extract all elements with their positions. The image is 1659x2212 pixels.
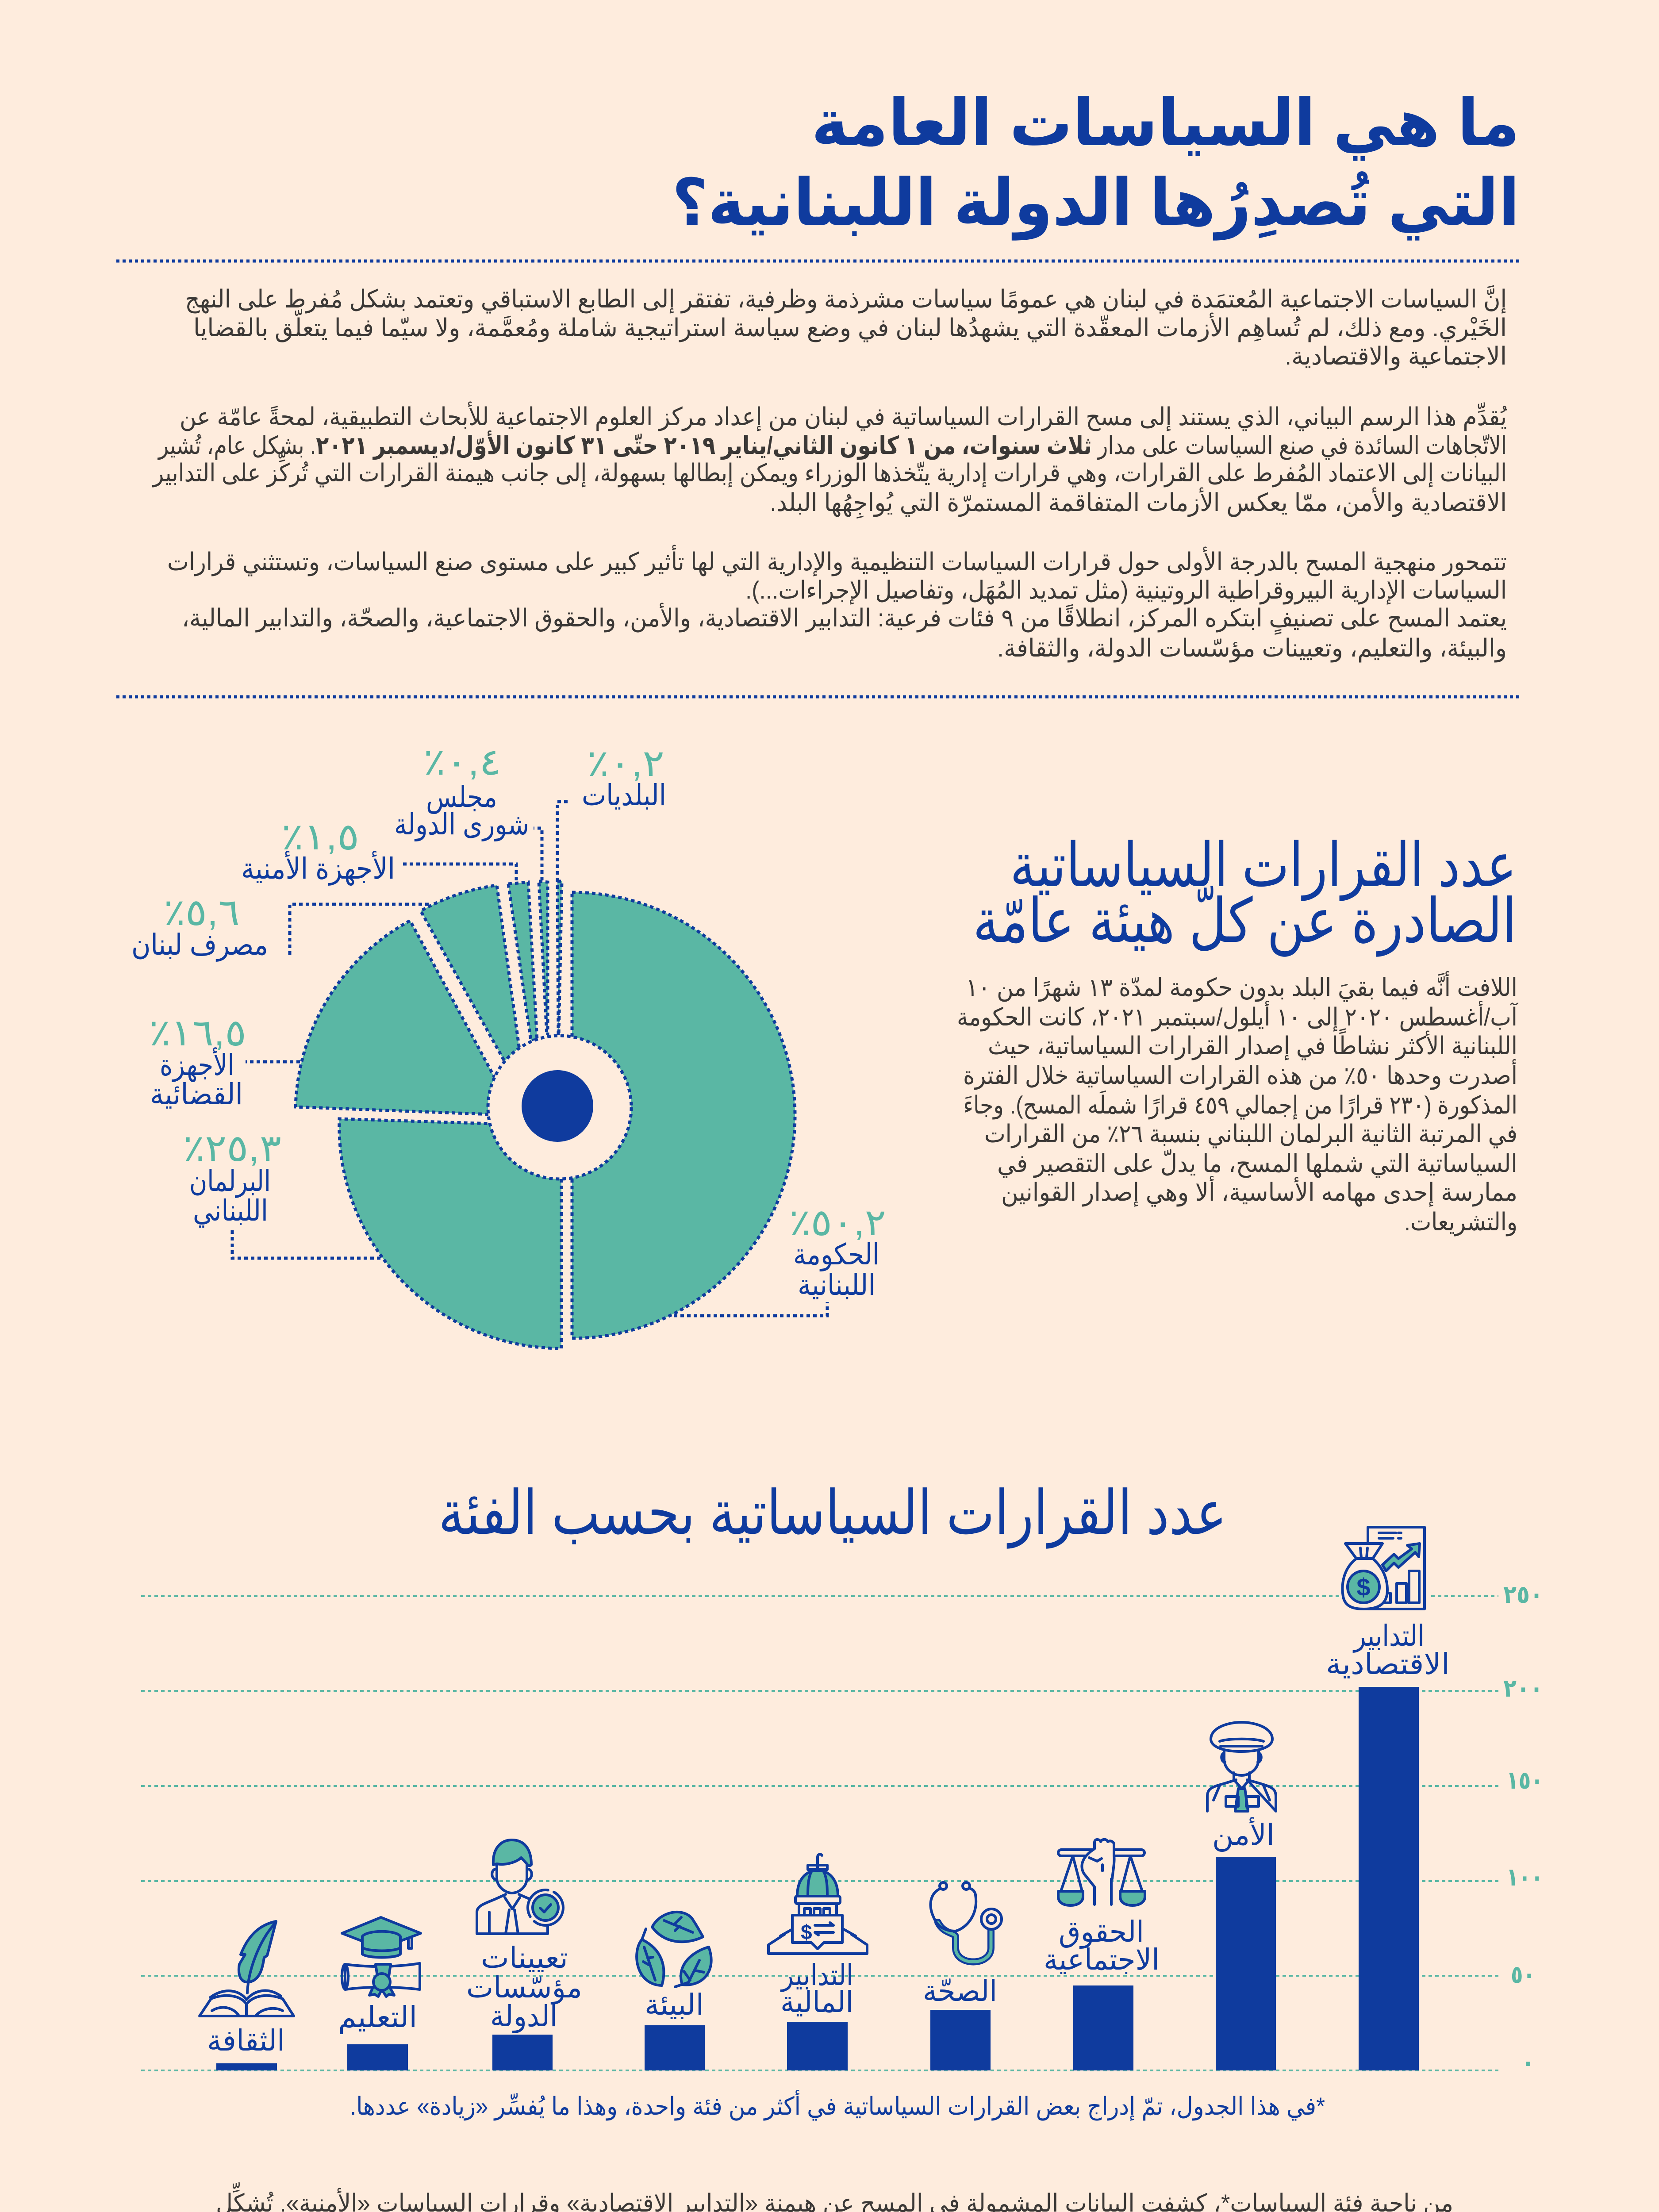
icon: money bag and chart <box>1343 1527 1425 1609</box>
bars <box>216 1687 1419 2070</box>
axis labels: ٥٠ <box>1511 1960 1535 1988</box>
icon: money bag and chart: $ <box>1356 1573 1371 1601</box>
icon: fist holding scales <box>1058 1839 1145 1905</box>
text block: public bodies commentary: اللافت أنَّه فيما بقيَ البلد بدون حكومة لمدّة ١٣ شهرًا من ١٠ <box>966 971 1517 1002</box>
label: parliament: البرلمان <box>189 1164 271 1198</box>
axis labels <box>1503 1580 1543 2076</box>
axis labels: ٠ <box>1521 2048 1536 2076</box>
bar labels: التدابير <box>780 1959 853 1992</box>
pie slice: judiciary 16.5% <box>296 921 515 1115</box>
label: municipalities <box>582 742 666 811</box>
text block: introduction: والبيئة، والتعليم، وتعيينات مؤسّسات الدولة، والثقافة. <box>997 634 1507 663</box>
pie slice: security agencies 1.5% <box>508 882 537 1041</box>
bar labels: الدولة <box>490 2000 557 2033</box>
text block: introduction: تتمحور منهجية المسح بالدرجة الأولى حول قرارات السياسات التنظيمية والإدارية التي لها تأثير كبير على مستوى صنع السياسات، وتستثني قرارات <box>167 545 1507 576</box>
label: state council: مجلس <box>426 780 497 814</box>
bar labels: الاقتصادية <box>1326 1647 1450 1680</box>
bar labels: المالية <box>780 1985 853 2018</box>
label: government: الحكومة <box>793 1238 879 1271</box>
panel: bar chart by category <box>141 1527 1543 2076</box>
pie slice: state council 0.4% <box>539 881 548 1035</box>
text block: introduction: يعتمد المسح على تصنيفٍ ابتكره المركز، انطلاقًا من ٩ فئات فرعية: التدابير الاقتصادية، والأمن، والحقوق الاجتماعية، والصحّة، والتدابير المالية، <box>182 603 1507 635</box>
text block: public bodies commentary: المذكورة (٢٣٠ قرارًا من إجمالي ٤٥٩ قرارًا شملَه المسح). وجاءَ <box>963 1091 1517 1120</box>
title: ما هي السياسات العامة <box>811 87 1520 161</box>
label: government: اللبنانية <box>798 1268 876 1301</box>
footnote: *في هذا الجدول، تمّ إدراج بعض القرارات السياساتية في أكثر من فئة واحدة، وهذا ما يُفسِّر «زيادة» عددها. <box>350 2090 1325 2121</box>
pie slice: central bank 5.6% <box>421 885 526 1101</box>
label: central bank: مصرف لبنان <box>131 928 268 962</box>
text block: introduction: الاقتصادية والأمن، ممّا يعكس الأزمات المتفاقمة المستمرّة التي يُواجِهُها البلد. <box>770 487 1507 519</box>
bar labels: مؤسّسات <box>466 1971 582 2005</box>
label: municipalities: البلديات <box>582 779 666 811</box>
label: parliament: ٢٥,٣٪ <box>183 1127 281 1169</box>
heading: decisions per public body: عدد القرارات السياساتية <box>1010 831 1517 901</box>
label: central bank: ٥,٦٪ <box>164 891 240 933</box>
bar labels: الاجتماعية <box>1044 1943 1160 1976</box>
label: central bank <box>131 891 268 962</box>
label: parliament <box>183 1127 281 1228</box>
icon: finance building <box>768 1854 867 1954</box>
text block: introduction: يُقدِّم هذا الرسم البياني، الذي يستند إلى مسح القرارات السياساتية في لبنان من إعداد مركز العلوم الاجتماعية للأبحاث التطبيقية، لمحةً عامّة عن <box>180 401 1507 432</box>
icon: appointed official <box>477 1840 563 1934</box>
bar labels <box>207 1619 1450 2057</box>
bar labels: الأمن <box>1212 1816 1275 1852</box>
label: state council <box>394 741 529 841</box>
label: parliament: اللبناني <box>193 1194 268 1228</box>
text block: introduction: السياسات الإدارية البيروقراطية الروتينية (مثل تمديد المُهَل، وتفاصيل الإجراءات...). <box>745 576 1507 605</box>
label: government: ٥٠,٢٪ <box>789 1202 886 1243</box>
icon: stethoscope <box>930 1882 1002 1962</box>
icon: finance building: $ <box>801 1920 812 1943</box>
label: security agencies <box>241 816 395 886</box>
label: government <box>789 1202 886 1301</box>
label: municipalities: ٠,٢٪ <box>587 742 664 784</box>
text block: public bodies commentary <box>957 971 1518 1237</box>
label: security agencies: ١,٥٪ <box>281 816 359 857</box>
label: state council: ٠,٤٪ <box>423 741 501 783</box>
label: state council: شورى الدولة <box>394 808 529 841</box>
bar labels: الصحّة <box>923 1974 997 2007</box>
text block: public bodies commentary: ممارسة إحدى مهامه الأساسية، ألا وهي إصدار القوانين <box>1001 1176 1517 1207</box>
bar labels: التعليم <box>338 2001 417 2034</box>
heading: decisions per public body <box>973 831 1517 957</box>
axis labels: ١٥٠ <box>1506 1766 1543 1794</box>
text block: public bodies commentary: السياساتية التي شملها المسح، ما يدلّ على التقصير في <box>997 1149 1517 1178</box>
bar labels: البيئة <box>645 1988 704 2021</box>
icon: book and quill <box>200 1921 294 2016</box>
pie slice: parliament 25.3% <box>339 1119 561 1348</box>
title: التي تُصدِرُها الدولة اللبنانية؟ <box>672 166 1520 241</box>
icon: graduation cap and diploma <box>342 1917 421 1997</box>
heading: decisions per public body: الصادرة عن كلّ هيئة عامّة <box>973 885 1517 957</box>
pie centre dot <box>522 1070 593 1142</box>
text block: public bodies commentary: في المرتبة الثانية البرلمان اللبناني بنسبة ٢٦٪ من القرارات <box>984 1120 1517 1148</box>
panel: pie chart by public body <box>131 741 886 1348</box>
text block: public bodies commentary: اللبنانية الأكثر نشاطًا في إصدار القرارات السياساتية، حيث <box>988 1028 1517 1061</box>
text block: introduction: الخَيْري. ومع ذلك، لم تُساهِم الأزمات المعقّدة التي يشهدُها لبنان في وضع سياسة استراتيجية شاملة ومُعمَّمة، ولا سيّما فيما يتعلّق بالقضايا <box>193 309 1507 342</box>
pie slice: government 50.2% <box>572 892 795 1338</box>
pie slice: municipalities 0.2% <box>557 881 562 1035</box>
label: security agencies: الأجهزة الأمنية <box>241 850 395 886</box>
text block: introduction: البيانات إلى الاعتماد المُفرط على القرارات، وهي قرارات إدارية يتّخذها الوزراء ويمكن إبطالها بسهولة، إلى جانب هيمنة القرارات التي تُركِّز على التدابير <box>152 452 1507 488</box>
bar labels: تعيينات <box>481 1941 568 1974</box>
text block: introduction: الاتّجاهات السائدة في صنع السياسات على مدار ثلاث سنوات، من ١ كانون الثاني/يناير ٢٠١٩ حتّى ٣١ كانون الأوّل/ديسمبر ٢٠٢١. بشكل عام، تُشير <box>157 430 1507 460</box>
heading: decisions by category: عدد القرارات السياساتية بحسب الفئة <box>438 1479 1227 1549</box>
axis labels: ٢٠٠ <box>1503 1674 1543 1702</box>
axis labels: ٢٥٠ <box>1503 1580 1543 1608</box>
icon: recycling leaves <box>637 1912 711 1987</box>
axis labels: ١٠٠ <box>1506 1863 1543 1891</box>
bar labels: الثقافة <box>207 2024 285 2057</box>
label: judiciary: ١٦,٥٪ <box>149 1012 246 1053</box>
label: judiciary: القضائية <box>150 1078 243 1110</box>
bar labels: التدابير <box>1352 1619 1425 1653</box>
bar labels: الحقوق <box>1059 1915 1144 1949</box>
label: judiciary: الأجهزة <box>160 1047 234 1082</box>
text block: introduction <box>152 284 1507 663</box>
text block: introduction: الاجتماعية والاقتصادية. <box>1285 342 1507 371</box>
text block: public bodies commentary: أصدرت وحدها ٥٠٪ من هذه القرارات السياساتية خلال الفترة <box>963 1059 1517 1090</box>
title <box>672 87 1520 241</box>
label: judiciary <box>149 1012 246 1110</box>
text block: public bodies commentary: والتشريعات. <box>1404 1208 1517 1237</box>
leader lines <box>232 802 827 1316</box>
text block: introduction: إنَّ السياسات الاجتماعية المُعتمَدة في لبنان هي عمومًا سياسات مشرذمة وظرفية، تفتقر إلى الطابع الاستباقي وتعتمد بشكل مُفرط على النهج <box>185 284 1507 314</box>
text block: public bodies commentary: آب/أغسطس ٢٠٢٠ إلى ١٠ أيلول/سبتمبر ٢٠٢١، كانت الحكومة <box>957 1001 1518 1032</box>
icon: security officer <box>1207 1722 1276 1811</box>
pie centre hole <box>488 1036 631 1179</box>
